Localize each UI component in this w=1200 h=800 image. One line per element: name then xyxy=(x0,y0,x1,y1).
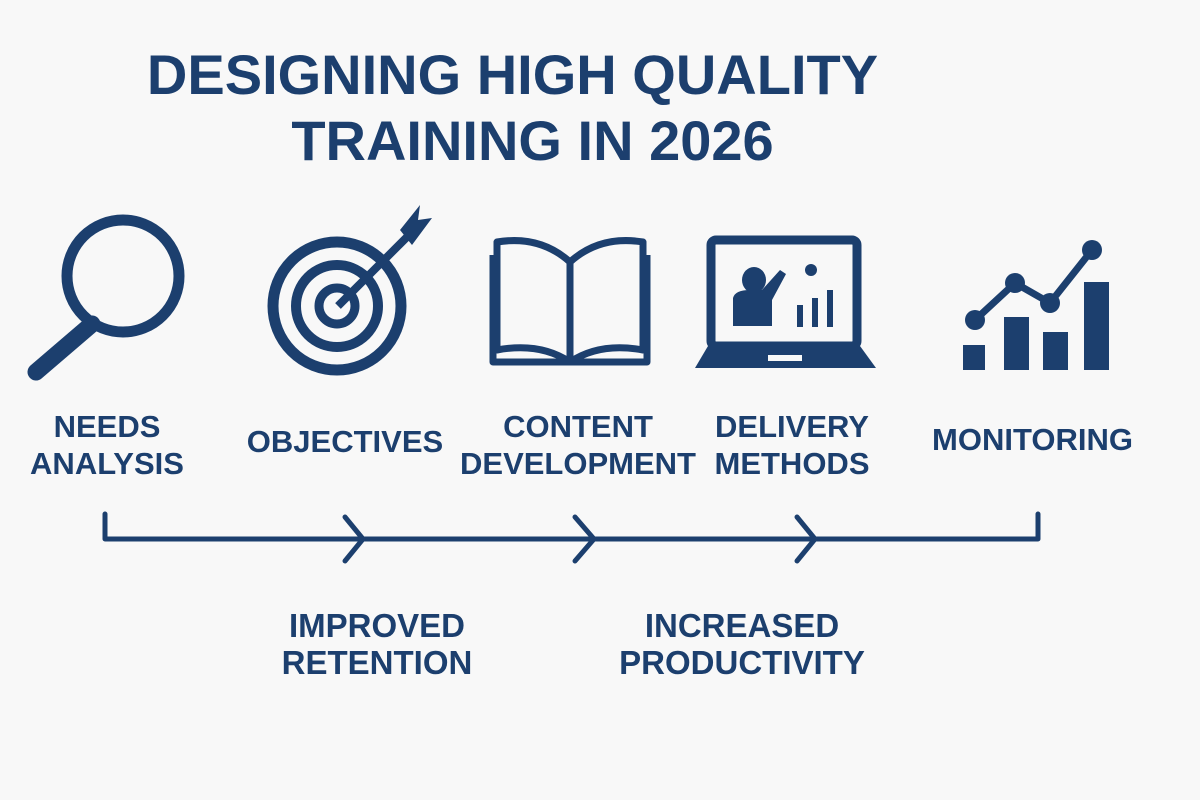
label: objectives: OBJECTIVES xyxy=(247,424,443,459)
icon: magnifier xyxy=(36,220,179,372)
title: TRAINING IN 2026 xyxy=(291,109,774,172)
icon: laptop presentation xyxy=(695,240,876,368)
icon: growth chart xyxy=(963,240,1109,370)
timeline arrow xyxy=(105,514,1038,561)
outcome: increased productivity: PRODUCTIVITY xyxy=(619,644,865,681)
icon: book xyxy=(493,241,647,362)
label: needs analysis xyxy=(30,409,184,481)
label: needs analysis: ANALYSIS xyxy=(30,446,184,481)
outcome: improved retention: IMPROVED xyxy=(289,607,465,644)
icon: target xyxy=(273,205,432,370)
outcome: increased productivity: INCREASED xyxy=(645,607,839,644)
label: content development xyxy=(460,409,696,481)
label: delivery methods: METHODS xyxy=(714,446,870,481)
label: delivery methods: DELIVERY xyxy=(715,409,869,444)
label: needs analysis: NEEDS xyxy=(54,409,160,444)
outcome: improved retention: RETENTION xyxy=(282,644,472,681)
outcome: improved retention xyxy=(282,607,472,681)
outcome: increased productivity xyxy=(619,607,865,681)
label: content development: DEVELOPMENT xyxy=(460,446,696,481)
label: content development: CONTENT xyxy=(503,409,653,444)
label: delivery methods xyxy=(714,409,870,481)
label: monitoring: MONITORING xyxy=(932,422,1133,457)
title xyxy=(147,43,878,172)
title: DESIGNING HIGH QUALITY xyxy=(147,43,878,106)
